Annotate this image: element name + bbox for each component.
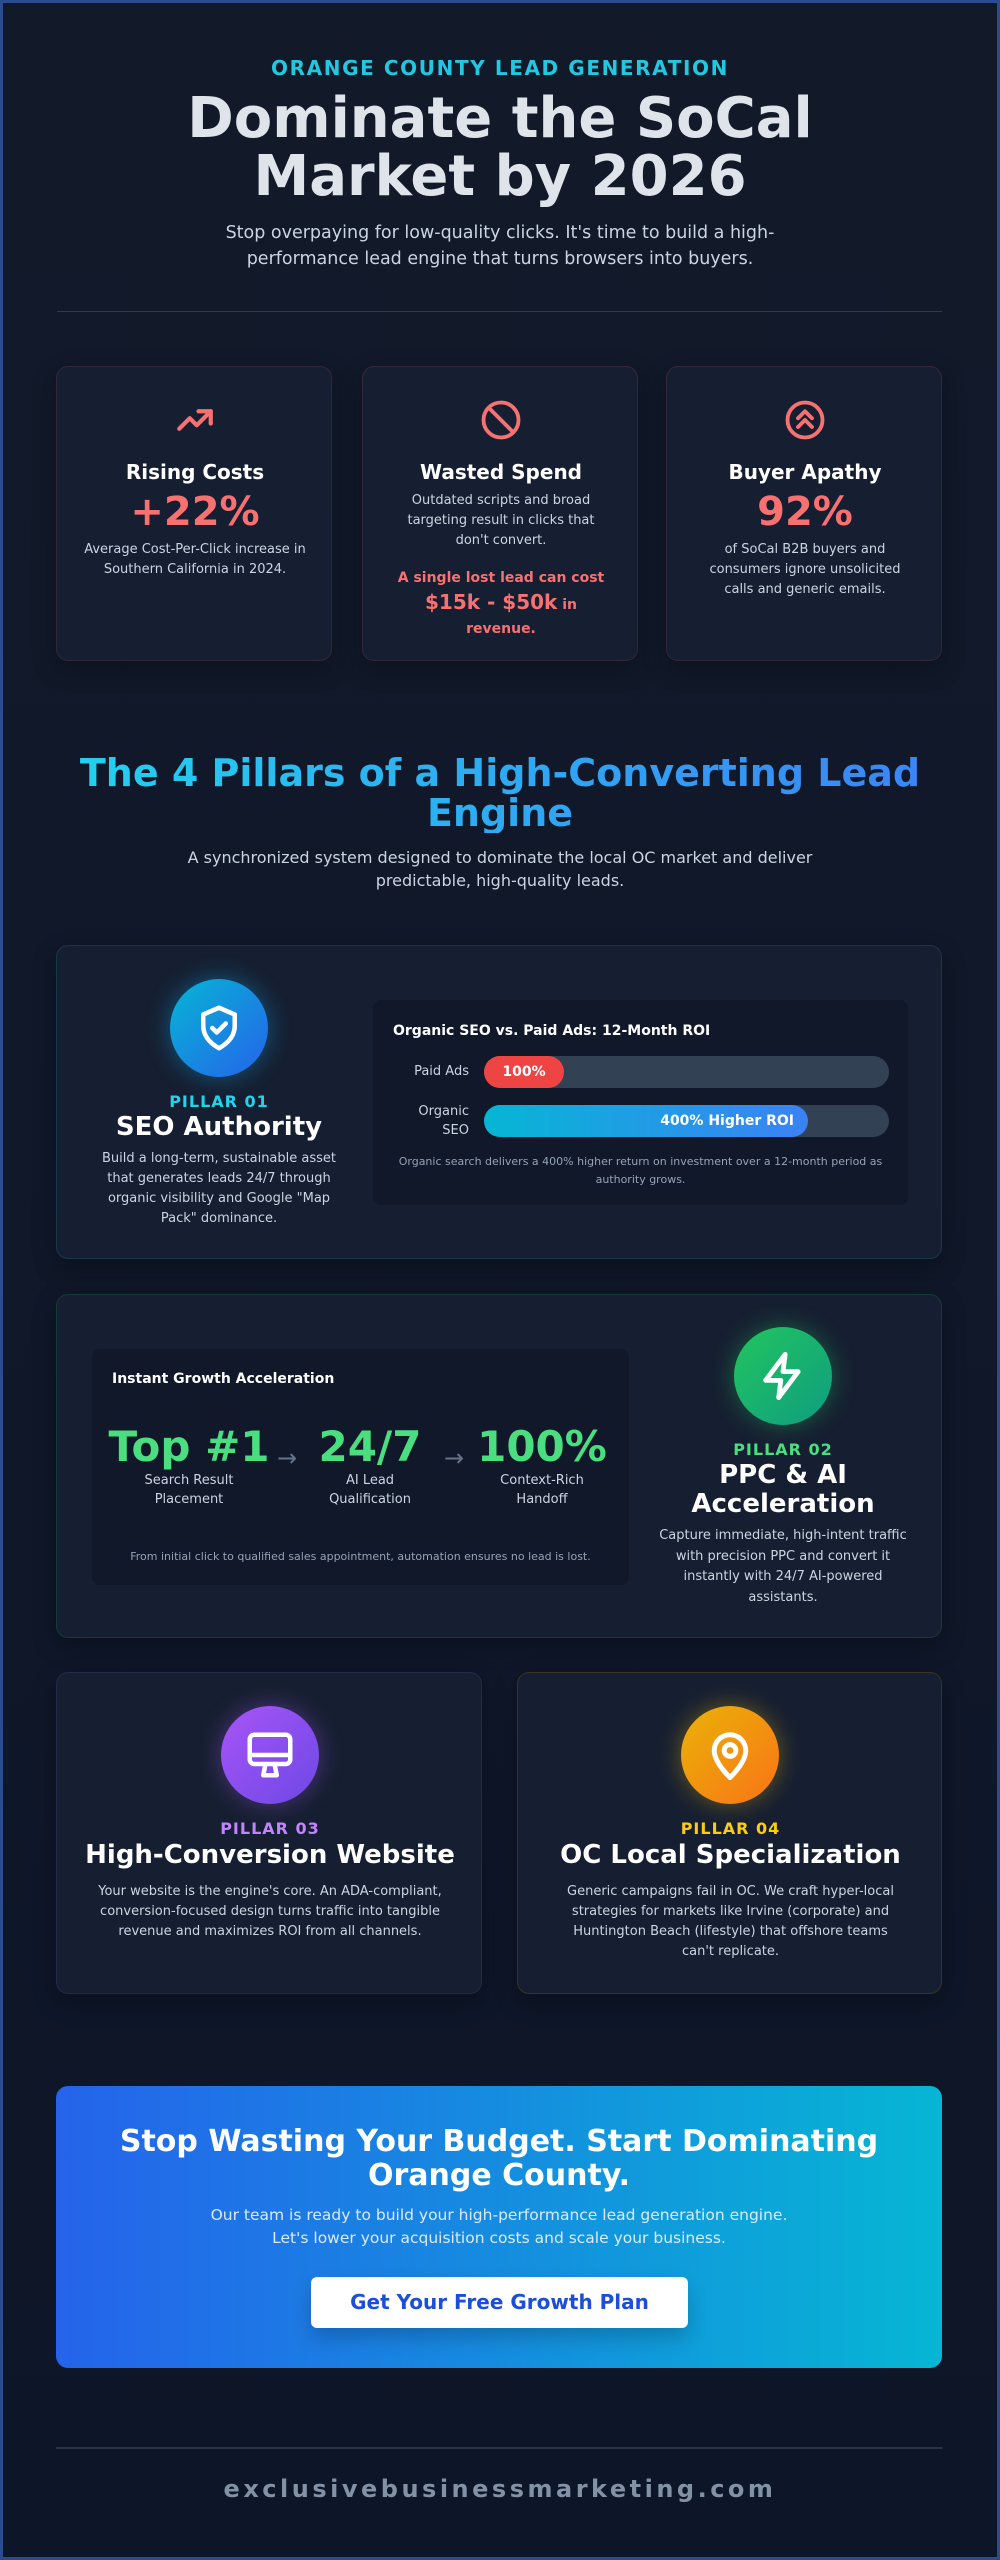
stat: +22% (130, 489, 260, 535)
pillar text: Build a long-term, sustainable asset that generates leads 24/7 through organic visibility and Google "Map Pack" dominance. (102, 1151, 336, 1226)
panel: buyer apathy (666, 366, 942, 661)
panel: rising costs (56, 366, 332, 661)
bar chart (373, 1000, 908, 1205)
bar chart: Organic (418, 1104, 469, 1119)
panel: pillar 03 (56, 1672, 482, 1994)
bar chart: Organic search delivers a 400% higher return on investment over a 12-month period as authority grows. (399, 1155, 882, 1186)
cta text: Our team is ready to build your high-performance lead generation engine. (211, 2206, 787, 2224)
subtitle: Stop overpaying for low-quality clicks. It's time to build a high-performance lead engine that turns browsers into buyers. (226, 223, 774, 269)
title: Market by 2026 (253, 144, 747, 209)
stat: 92% (757, 489, 853, 535)
flow chart: Context-Rich (500, 1473, 584, 1488)
tag line: ORANGE COUNTY LEAD GENERATION (271, 56, 729, 80)
cta heading: Stop Wasting Your Budget. Start Dominating Orange County. (120, 2124, 878, 2193)
arrow: → (444, 1444, 464, 1472)
panel: wasted spend (362, 366, 638, 661)
callout: revenue. (466, 621, 536, 637)
section heading: The 4 Pillars of a High-Converting Lead Engine (80, 751, 920, 835)
icon: ban (482, 400, 520, 440)
pillar title: Acceleration (691, 1489, 875, 1519)
icon: monitor (221, 1706, 319, 1804)
icon: shield (170, 979, 268, 1077)
title (187, 86, 813, 209)
callout: A single lost lead can cost (398, 570, 604, 586)
flow chart: Top #1 (108, 1422, 270, 1471)
flow chart (92, 1349, 629, 1585)
label: PILLAR 03 (220, 1819, 320, 1838)
bar chart: Organic SEO vs. Paid Ads: 12-Month ROI (393, 1023, 710, 1039)
heading: Wasted Spend (420, 460, 582, 484)
flow chart: Instant Growth Acceleration (112, 1371, 334, 1387)
flow chart: Search Result (145, 1473, 233, 1488)
heading: Buyer Apathy (728, 460, 882, 484)
cta text: Let's lower your acquisition costs and scale your business. (272, 2229, 726, 2247)
title: Dominate the SoCal (187, 86, 813, 151)
heading: Rising Costs (126, 460, 264, 484)
button: Get Your Free Growth Plan (350, 2290, 649, 2314)
icon: zap (734, 1327, 832, 1425)
pillar title: SEO Authority (116, 1112, 322, 1142)
call to action (56, 2086, 942, 2368)
flow chart: 24/7 (318, 1422, 422, 1471)
bar chart: 400% Higher ROI (660, 1113, 794, 1129)
panel: pillar 04 (517, 1672, 942, 1994)
text: Outdated scripts and broad targeting result in clicks that don't convert. (407, 493, 594, 548)
pillar title (691, 1460, 875, 1519)
footer: exclusivebusinessmarketing.com (224, 2475, 776, 2503)
panel: pillar 01 (56, 945, 942, 1259)
flow chart: 100% (477, 1422, 607, 1471)
icon: chevrons up circle (786, 400, 824, 440)
bar chart: 100% (502, 1064, 546, 1080)
flow chart: Placement (155, 1492, 223, 1507)
text: of SoCal B2B buyers and consumers ignore unsolicited calls and generic emails. (709, 542, 901, 597)
icon: map pin (681, 1706, 779, 1804)
flow chart: Qualification (329, 1492, 411, 1507)
label: PILLAR 04 (681, 1819, 780, 1838)
section subheading: A synchronized system designed to dominate the local OC market and deliver predictable, high-quality leads. (188, 848, 812, 890)
pillar text: Generic campaigns fail in OC. We craft hyper-local strategies for markets like Irvine (corporate) and Huntington Beach (lifestyle) that offshore teams can't replicate. (567, 1884, 894, 1959)
callout: $15k - $50k in (425, 590, 577, 614)
arrow: → (277, 1444, 297, 1472)
pillar title: High-Conversion Website (85, 1840, 455, 1870)
flow chart: Handoff (516, 1492, 568, 1507)
callout (398, 570, 604, 637)
button (311, 2277, 688, 2328)
pillar title: OC Local Specialization (560, 1840, 901, 1870)
text: Average Cost-Per-Click increase in Southern California in 2024. (84, 542, 306, 577)
flow chart: AI Lead (346, 1473, 394, 1488)
pillar title: PPC & AI (719, 1460, 847, 1490)
flow chart: From initial click to qualified sales appointment, automation ensures no lead is lost. (130, 1550, 591, 1563)
panel: pillar 02 (56, 1294, 942, 1638)
label: PILLAR 01 (169, 1092, 269, 1111)
pillar text: Your website is the engine's core. An ADA-compliant, conversion-focused design turns traffic into tangible revenue and maximizes ROI from all channels. (98, 1884, 442, 1939)
bar chart: Paid Ads (414, 1064, 469, 1079)
label: PILLAR 02 (733, 1440, 833, 1459)
icon: trending up (177, 409, 213, 431)
pillar text: Capture immediate, high-intent traffic with precision PPC and convert it instantly with 24/7 AI-powered assistants. (659, 1528, 907, 1604)
cta text (211, 2206, 787, 2247)
bar chart: SEO (442, 1123, 469, 1138)
